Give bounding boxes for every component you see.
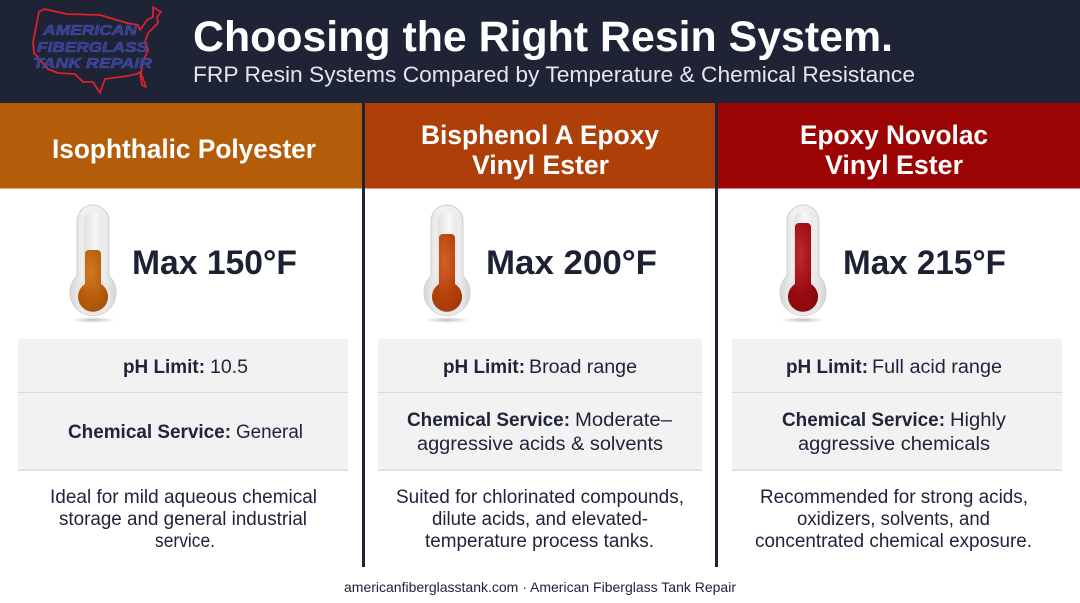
icon: thermometer: [780, 205, 826, 323]
pH limit row: 10.5: [210, 357, 248, 378]
logo: American Fiberglass Tank Repair: FIBERGLASS: [37, 39, 148, 56]
pH limit row: pH Limit:: [443, 357, 525, 378]
description: Recommended for strong acids,: [760, 487, 1028, 508]
chemical service row: General: [236, 422, 303, 443]
description: temperature process tanks.: [425, 531, 654, 552]
pH limit row: Full acid range: [872, 357, 1002, 378]
column heading band: Epoxy Novolac: [800, 120, 988, 150]
chemical service row: Highly: [950, 410, 1007, 431]
pH limit row: [732, 339, 1062, 394]
column heading band: Vinyl Ester: [825, 150, 963, 180]
logo: American Fiberglass Tank Repair: AMERICAN: [42, 22, 138, 39]
pH limit row: [378, 339, 702, 394]
chemical service row: Chemical Service:: [407, 410, 570, 431]
description: [50, 487, 317, 552]
column heading band: Bisphenol A Epoxy: [421, 120, 659, 150]
description: Ideal for mild aqueous chemical: [50, 487, 317, 508]
icon: thermometer: [70, 205, 116, 323]
chemical service row: [378, 393, 702, 471]
chemical service row: aggressive acids & solvents: [417, 434, 663, 455]
column heading band: [365, 103, 715, 188]
description: service.: [155, 531, 215, 552]
footer: americanfiberglasstank.com · American Fiberglass Tank Repair: [344, 579, 736, 595]
chemical service row: aggressive chemicals: [798, 434, 990, 455]
temperature limit: Max 200°F: [486, 244, 657, 282]
description: concentrated chemical exposure.: [755, 531, 1032, 552]
chemical service row: Chemical Service:: [68, 422, 231, 443]
title: Choosing the Right Resin System.: [193, 13, 893, 61]
temperature limit: Max 150°F: [132, 244, 297, 282]
description: [755, 487, 1032, 552]
panel: Bisphenol A Epoxy Vinyl Ester: [365, 103, 715, 552]
column heading band: [718, 103, 1080, 188]
chemical service row: [732, 393, 1062, 471]
description: oxidizers, solvents, and: [797, 509, 990, 530]
panel: Epoxy Novolac Vinyl Ester: [718, 103, 1080, 552]
description: Suited for chlorinated compounds,: [396, 487, 684, 508]
logo: American Fiberglass Tank Repair: TANK REPAIR: [33, 55, 152, 72]
column heading band: [0, 103, 362, 188]
column heading band: Isophthalic Polyester: [52, 134, 316, 164]
pH limit row: [18, 339, 348, 394]
description: storage and general industrial: [59, 509, 307, 530]
column heading band: Vinyl Ester: [472, 150, 609, 180]
subtitle: FRP Resin Systems Compared by Temperature & Chemical Resistance: [193, 62, 915, 87]
logo: American Fiberglass Tank Repair: [33, 7, 161, 93]
description: dilute acids, and elevated-: [432, 509, 648, 530]
temperature limit: Max 215°F: [843, 244, 1006, 282]
panel: Isophthalic Polyester: [0, 103, 362, 552]
icon: thermometer: [424, 205, 470, 323]
chemical service row: [18, 393, 348, 471]
chemical service row: Moderate–: [575, 410, 672, 431]
pH limit row: pH Limit:: [123, 357, 205, 378]
pH limit row: pH Limit:: [786, 357, 868, 378]
description: [396, 487, 684, 552]
chemical service row: Chemical Service:: [782, 410, 945, 431]
header bar: [0, 0, 1080, 103]
pH limit row: Broad range: [529, 357, 637, 378]
